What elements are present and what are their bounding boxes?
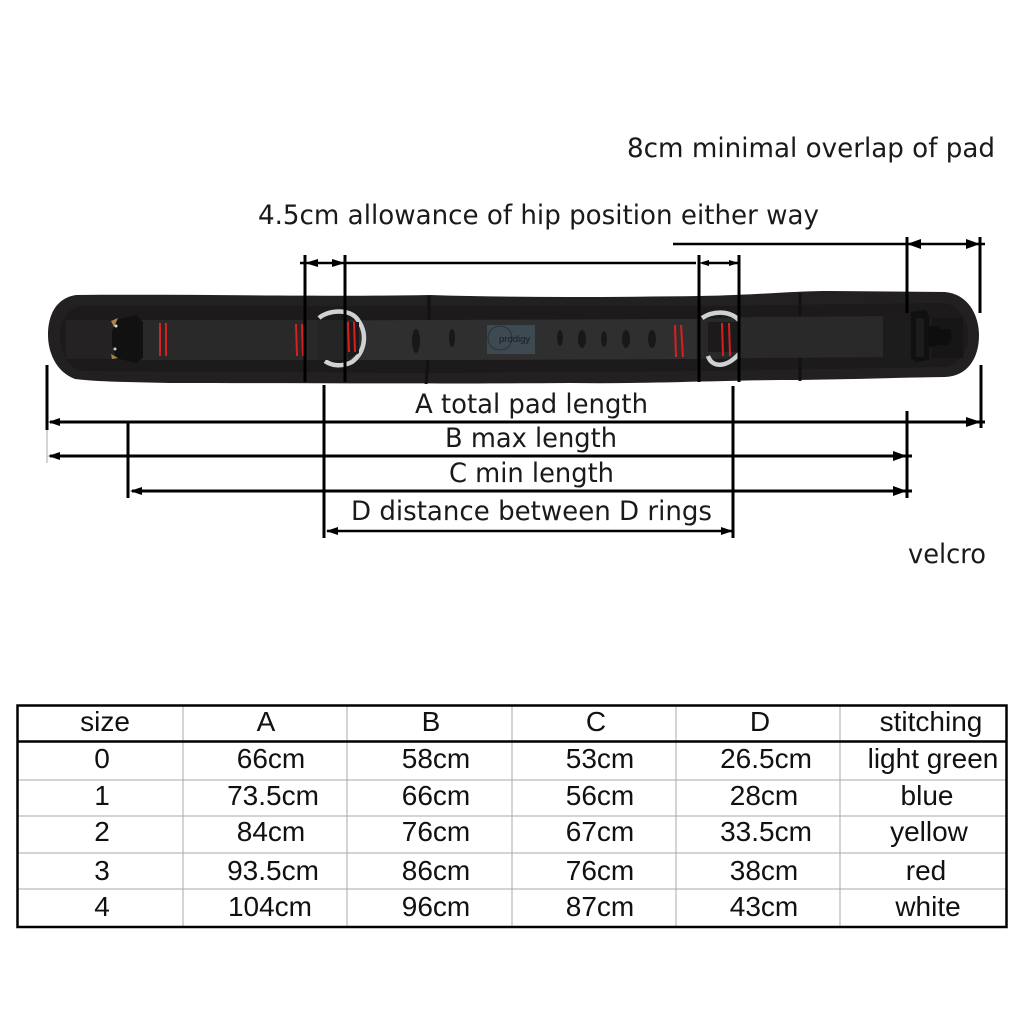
row size 2: yellow <box>890 816 969 847</box>
row size 0: 0 <box>94 743 110 774</box>
pad inner panel <box>60 303 968 373</box>
header row <box>80 706 982 737</box>
header row: D <box>750 706 770 737</box>
row size 3: red <box>906 855 946 886</box>
C line <box>132 490 912 492</box>
logo patch <box>487 325 535 354</box>
hip allowance markers <box>300 255 739 382</box>
B line <box>50 454 912 458</box>
label: velcro: velcro <box>908 539 986 570</box>
row size 1: 56cm <box>566 780 634 811</box>
row size 0: 26.5cm <box>720 743 812 774</box>
size table <box>18 706 1006 927</box>
belt pad <box>48 291 979 383</box>
row size 2: 33.5cm <box>720 816 812 847</box>
D line <box>327 530 733 532</box>
label: B: B max length <box>445 423 617 454</box>
strap shadows <box>412 329 656 353</box>
row size 3: 38cm <box>730 855 798 886</box>
row size 4: 96cm <box>402 891 470 922</box>
row size 1: 73.5cm <box>227 780 319 811</box>
left buckle <box>111 315 143 363</box>
arrowheads <box>48 239 981 535</box>
table grid <box>18 706 1006 927</box>
row size 1: 28cm <box>730 780 798 811</box>
left end panel <box>66 320 116 359</box>
row size 4: white <box>894 891 961 922</box>
row size 2: 67cm <box>566 816 634 847</box>
row size 4: 4 <box>94 891 110 922</box>
row size 1 <box>94 780 953 811</box>
pad seams <box>426 293 800 384</box>
A line <box>50 420 985 424</box>
row size 1: 1 <box>94 780 110 811</box>
webbing strap <box>140 316 908 360</box>
header row: B <box>422 706 440 737</box>
row size 3 <box>94 855 946 886</box>
belt photo <box>48 291 979 384</box>
header row: size <box>80 706 130 737</box>
header row: stitching <box>880 706 982 737</box>
row size 3: 86cm <box>402 855 470 886</box>
label: D: D distance between D rings <box>351 496 712 527</box>
row size 3: 76cm <box>566 855 634 886</box>
row size 2 <box>94 816 969 847</box>
left D ring <box>317 312 364 365</box>
label: hip allowance: 4.5cm allowance of hip position either way <box>258 200 819 231</box>
row size 1: blue <box>901 780 953 811</box>
row size 2: 2 <box>94 816 110 847</box>
row size 1: 66cm <box>402 780 470 811</box>
row size 3: 3 <box>94 855 110 886</box>
length extension lines <box>47 365 981 538</box>
row size 4: 87cm <box>566 891 634 922</box>
right D ring <box>702 313 739 365</box>
centre webbing <box>352 319 696 360</box>
row size 3: 93.5cm <box>227 855 319 886</box>
row size 4 <box>94 891 961 922</box>
row size 2: 76cm <box>402 816 470 847</box>
overlap markers <box>673 237 985 313</box>
label: overlap of pad: 8cm minimal overlap of pad <box>627 133 995 164</box>
row size 4: 104cm <box>228 891 312 922</box>
row size 2: 84cm <box>237 816 305 847</box>
row size 0: 66cm <box>237 743 305 774</box>
header row: A <box>257 706 276 737</box>
red stitching <box>160 322 730 357</box>
label: A: A total pad length <box>415 389 648 420</box>
label: C: C min length <box>449 458 614 489</box>
row size 0 <box>94 743 998 774</box>
row size 0: 58cm <box>402 743 470 774</box>
header row: C <box>586 706 606 737</box>
right buckle <box>883 310 963 362</box>
dimension lines <box>47 237 985 538</box>
row size 4: 43cm <box>730 891 798 922</box>
row size 0: 53cm <box>566 743 634 774</box>
row size 0: light green <box>868 743 998 774</box>
logo patch: prodigy <box>499 334 530 345</box>
